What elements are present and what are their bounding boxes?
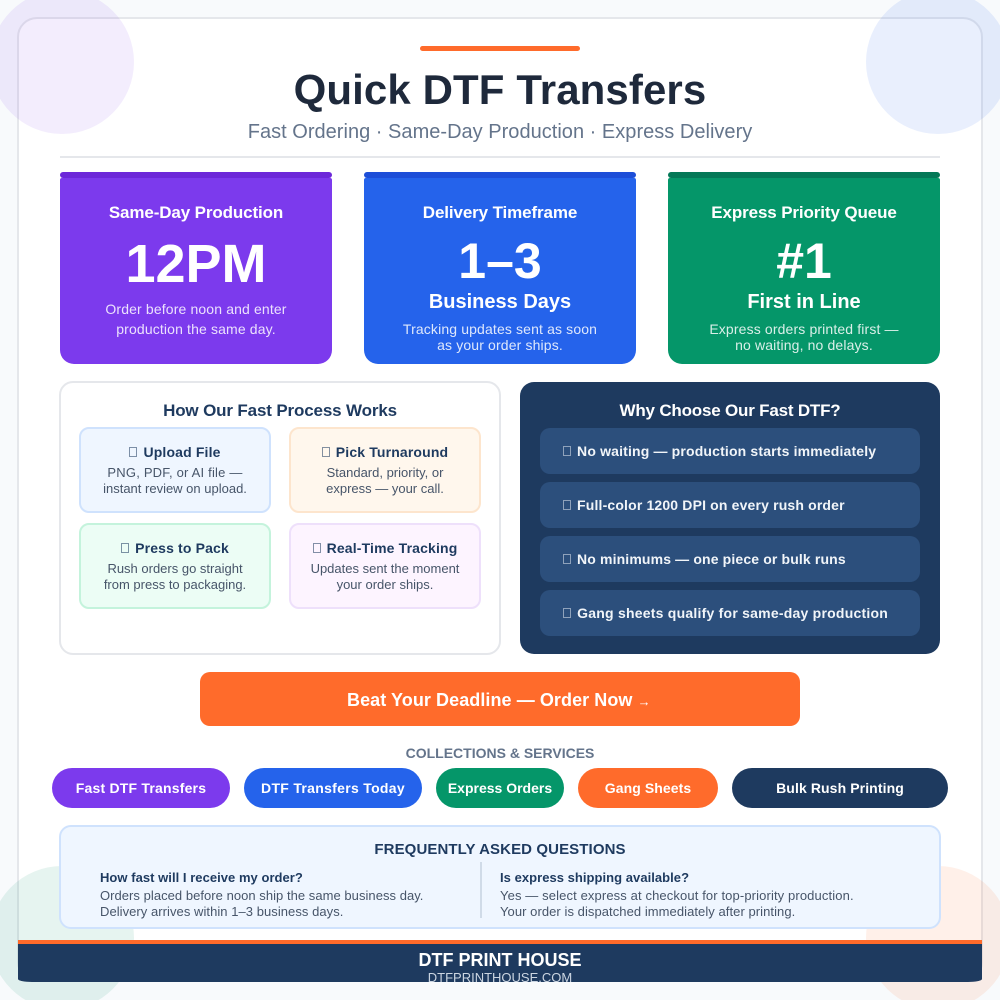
card description: production the same day. [116,321,276,337]
step heading: Upload File [143,444,221,460]
answer: Your order is dispatched immediately after printing. [500,904,795,919]
card top strip [60,172,332,178]
decorative circle: green [0,866,134,1000]
benefit: full color: Full-color 1200 DPI on every rush order [577,497,845,513]
step text: Updates sent the moment [311,561,459,576]
card top strip [364,172,636,178]
card description: Express orders printed first — [709,321,899,337]
panel: frequently asked questions [59,825,941,929]
step text: Rush orders go straight [107,561,243,576]
step text: instant review on upload. [103,481,247,496]
pill: fast dtf transfers: Fast DTF Transfers [76,780,206,796]
benefit: no minimums: No minimums — one piece or bulk runs [577,551,846,567]
panel heading: How Our Fast Process Works [163,401,397,420]
step text: express — your call. [326,481,444,496]
panel: delivery timeframe [364,172,636,364]
faq heading: FREQUENTLY ASKED QUESTIONS [374,841,626,858]
pill: bulk rush printing [732,768,948,808]
benefit: no waiting: No waiting — production starts immediately [577,443,876,459]
pill: express orders: Express Orders [448,780,552,796]
big stat: 1–3: 1–3 [458,233,542,289]
card description: Tracking updates sent as soon [403,321,597,337]
header accent bar [420,46,580,51]
card body [60,178,332,364]
step text: from press to packaging. [104,577,246,592]
header divider [60,156,940,158]
decorative circle: orange [866,866,1000,1000]
pill: dtf transfers today: DTF Transfers Today [261,780,405,796]
step heading: Pick Turnaround [336,444,448,460]
faq item: express shipping [500,870,854,919]
step text: PNG, PDF, or AI file — [107,465,243,480]
collections heading: COLLECTIONS & SERVICES [406,745,594,761]
big stat: 12PM: 12PM [125,234,267,294]
step text [103,465,247,496]
answer: Orders placed before noon ship the same business day. [100,888,423,903]
answer: Delivery arrives within 1–3 business days. [100,904,343,919]
step text [326,465,444,496]
card description: Order before noon and enter [105,301,287,317]
subtitle: Fast Ordering · Same-Day Production · Express Delivery [248,121,752,143]
pill: gang sheets [578,768,718,808]
answer [100,888,423,919]
card heading: Delivery Timeframe [423,203,577,222]
panel: how our fast process works [59,381,501,655]
benefit: no minimums [540,536,920,582]
pill: fast dtf transfers [52,768,230,808]
decorative circle: blue [866,0,1000,134]
pill: gang sheets: Gang Sheets [605,780,691,796]
answer [500,888,854,919]
step: real-time tracking [289,523,481,609]
panel heading: Why Choose Our Fast DTF? [620,401,840,420]
benefit: no waiting [540,428,920,474]
call to action button: Beat Your Deadline — Order Now → [347,690,651,710]
card description: as your order ships. [437,337,563,353]
footer [18,940,982,982]
stat unit: Business Days [429,291,571,313]
pill: express orders [436,768,564,808]
faq item: delivery speed [100,870,423,919]
card heading: Same-Day Production [109,203,283,222]
step: press to pack [79,523,271,609]
card description [709,321,899,353]
question: How fast will I receive my order? [100,870,303,885]
question: Is express shipping available? [500,870,689,885]
answer: Yes — select express at checkout for top-priority production. [500,888,854,903]
panel: same-day production [60,172,332,364]
card description [105,301,287,337]
call to action button [200,672,800,726]
step: pick turnaround [289,427,481,513]
panel: express priority queue [668,172,940,364]
title: Quick DTF Transfers [294,66,706,113]
stat unit: First in Line [747,291,861,313]
brand name: DTF PRINT HOUSE [418,950,582,970]
step text [311,561,460,592]
step text [104,561,246,592]
big stat: #1: #1 [776,233,832,289]
step heading: Real-Time Tracking [327,540,457,556]
card description: no waiting, no delays. [735,337,873,353]
faq divider [480,862,482,918]
panel: why choose our fast dtf [520,382,940,654]
step: upload file [79,427,271,513]
pill: bulk rush printing: Bulk Rush Printing [776,780,904,796]
benefit: gang sheets: Gang sheets qualify for same-day production [577,605,888,621]
decorative circle: purple [0,0,134,134]
card top strip [668,172,940,178]
card description [403,321,597,353]
step text: your order ships. [337,577,433,592]
card heading: Express Priority Queue [711,203,897,222]
pill: dtf transfers today [244,768,422,808]
benefit: full color [540,482,920,528]
card body [364,178,636,364]
benefit: gang sheets [540,590,920,636]
step heading: Press to Pack [135,540,229,556]
card body [668,178,940,364]
step text: Standard, priority, or [327,465,443,480]
